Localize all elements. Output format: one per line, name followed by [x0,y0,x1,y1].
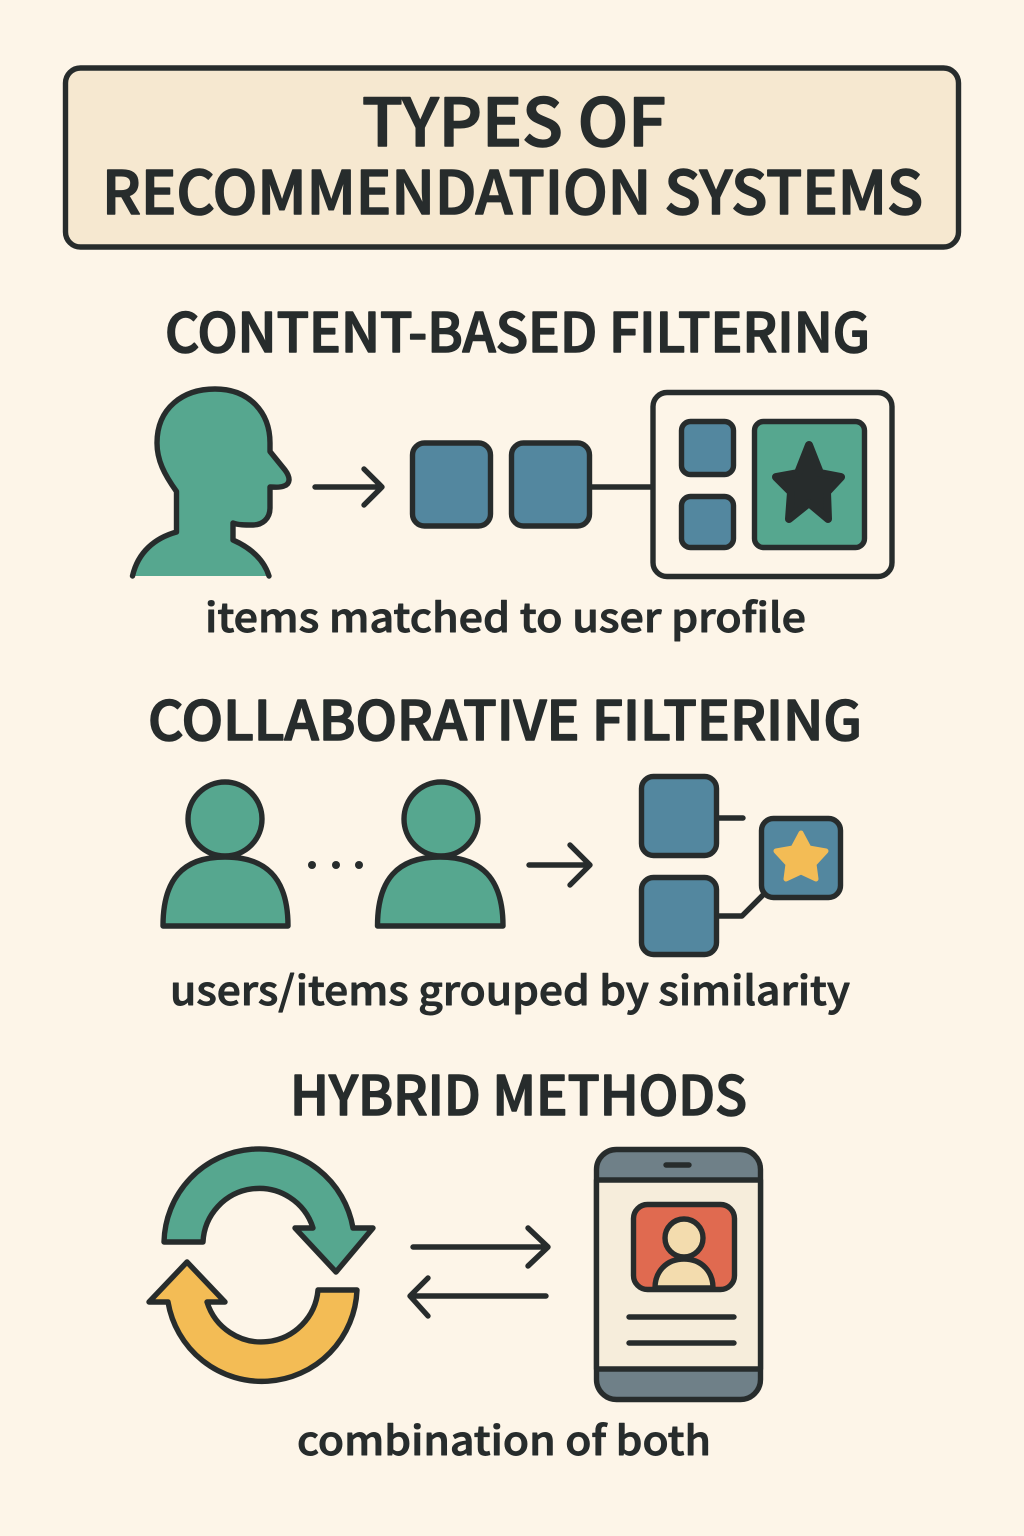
title text [102,70,923,232]
connector lines [718,818,765,916]
recommended item with star [754,422,864,548]
icon: yellow cycle arrow [149,1262,357,1381]
title text: TYPES OF [362,70,666,166]
title banner [66,68,958,247]
small item squares [682,422,734,548]
heading: collaborative filtering: COLLABORATIVE FILTERING [148,677,862,756]
caption: collaborative: users/items grouped by similarity [170,959,850,1017]
title text: RECOMMENDATION SYSTEMS [102,145,923,232]
arrow: to phone [413,1228,548,1266]
phone speaker [666,1162,689,1168]
icon: second user [378,782,503,926]
recommended item with gold star [762,818,840,898]
caption: content-based: items matched to user profile [205,586,806,644]
item squares [412,443,590,526]
arrow: users to items [529,845,590,885]
heading: content-based filtering: CONTENT-BASED FILTERING [165,289,870,368]
connector line [591,484,652,490]
item squares: collaborative [642,776,716,954]
arrow: user to items [315,469,382,505]
arrow: from phone [410,1278,546,1316]
icon: green cycle arrow [164,1149,373,1272]
icon: user profile head [132,389,289,576]
heading: hybrid methods: HYBRID METHODS [290,1052,747,1131]
profile photo [634,1204,734,1290]
ellipsis dots [308,861,363,869]
caption: hybrid: combination of both [297,1409,711,1467]
icon: phone [596,1150,760,1400]
text lines [629,1317,734,1343]
panel: matched items [653,392,892,576]
phone screen [596,1180,760,1369]
icon: first user [163,782,288,926]
